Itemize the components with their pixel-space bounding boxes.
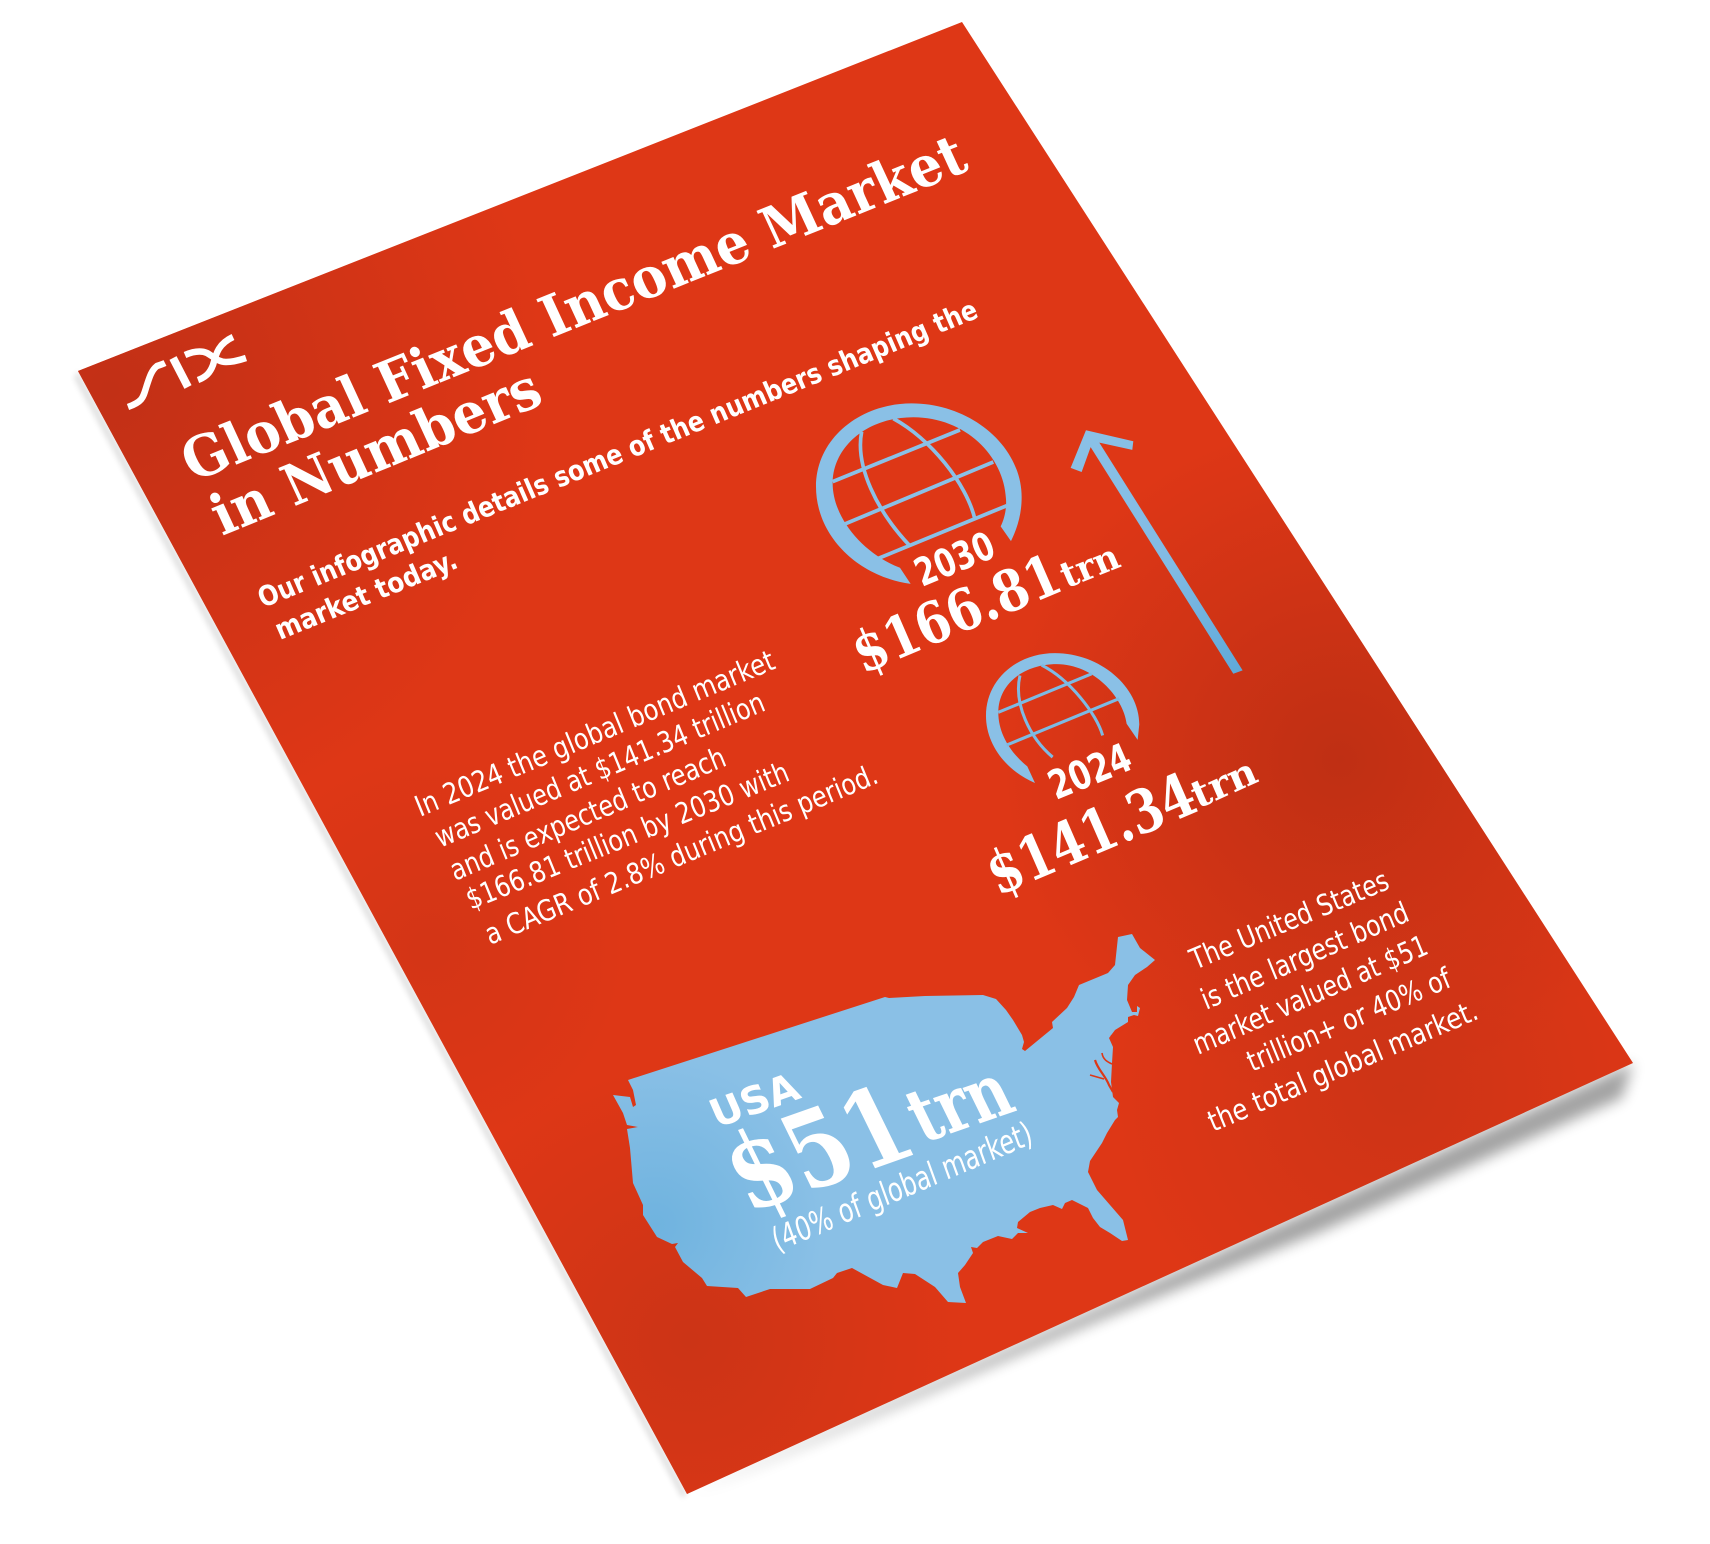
text block: United States callout: The United States [1184, 863, 1394, 977]
value: $166.81 trn: trn [1054, 536, 1126, 597]
map label: USA $51 trn: $51 [704, 1062, 933, 1236]
icon: globe 2024 [986, 653, 1139, 783]
text block: global bond market summary: and is expected to reach [445, 740, 731, 887]
value: $141.34 trn: $141.34 [976, 760, 1206, 910]
map: United States [613, 934, 1155, 1303]
label: 2024: 2024 [1042, 735, 1139, 809]
text block: United States callout: the total global market. [1203, 993, 1483, 1138]
text block: global bond market summary: a CAGR of 2.8% during this period. [480, 757, 883, 951]
label: 2030: 2030 [908, 524, 1002, 596]
value: $141.34 trn: trn [1184, 748, 1264, 817]
title: Global Fixed Income Market [171, 121, 977, 495]
subtitle [253, 293, 983, 646]
text block: global bond market summary: $166.81 trillion by 2030 with [461, 755, 794, 916]
subtitle: market today. [270, 543, 462, 646]
map label: USA $51 trn: USA [703, 1065, 807, 1137]
paper shadow [74, 371, 1633, 1498]
logo: SIX [128, 337, 246, 407]
subtitle: Our infographic details some of the numbers shaping the [253, 293, 983, 614]
text block: United States callout: trillion+ or 40% of [1242, 961, 1456, 1078]
text block: global bond market summary [410, 643, 883, 951]
text block: global bond market summary: In 2024 the global bond market [410, 643, 779, 823]
text block: global bond market summary: was valued at $141.34 trillion [430, 685, 770, 854]
title: in Numbers [200, 355, 552, 549]
text block: United States callout [1184, 863, 1483, 1138]
map label: USA $51 trn: trn [892, 1046, 1026, 1159]
text block: United States callout: is the largest bond [1196, 895, 1414, 1016]
icon: globe 2030 [816, 403, 1022, 584]
text block: United States callout: market valued at $51 [1188, 928, 1433, 1061]
value: $166.81 trn: $166.81 [842, 541, 1071, 687]
arrow: upward growth [1071, 430, 1243, 674]
map label: USA $51 trn: (40% of global market) [766, 1113, 1037, 1260]
